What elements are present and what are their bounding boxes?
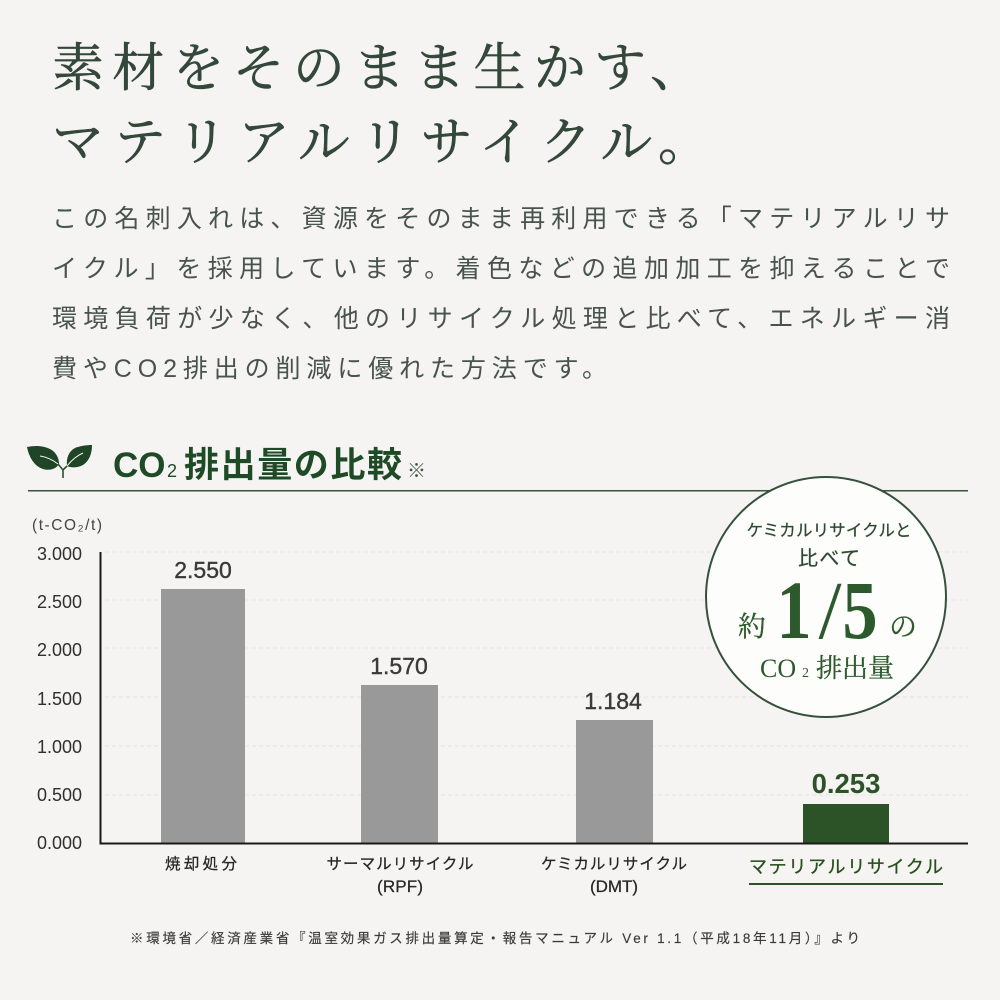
highlighted category: マテリアルリサイクル [749, 857, 943, 877]
y axis labels: 3.000 [37, 544, 82, 564]
highlight underline [749, 883, 943, 885]
unit label: (t-CO₂/t) [32, 517, 102, 534]
callout circle: 5 [842, 564, 878, 656]
callout circle: 2 [802, 666, 809, 681]
title [52, 41, 710, 172]
callout circle: 1 [776, 564, 812, 656]
body text: 費やCO2排出の削減に優れた方法です。 [52, 355, 607, 383]
chart heading: ※ [407, 461, 426, 482]
chart heading [113, 446, 426, 485]
callout circle [706, 477, 946, 717]
callout circle: 約 [738, 611, 766, 643]
y axis labels: 2.000 [37, 640, 82, 660]
category labels: (RPF) [377, 877, 423, 896]
bar values [174, 557, 642, 714]
title: 素材をそのまま生かす、 [52, 41, 702, 98]
y axis labels: 0.500 [37, 785, 82, 805]
y axis labels: 2.500 [37, 592, 82, 612]
bar values: 1.570 [370, 653, 428, 679]
y axis labels: 1.000 [37, 737, 82, 757]
bar values: 1.184 [584, 688, 642, 714]
category labels: (DMT) [590, 877, 638, 896]
highlighted value: 0.253 [812, 768, 880, 799]
title: マテリアルリサイクル。 [52, 115, 710, 172]
axes [100, 552, 968, 844]
category labels: ケミカルリサイクル [541, 855, 687, 873]
chart heading: 排出量の比較 [184, 446, 402, 485]
y axis labels: 1.500 [37, 689, 82, 709]
body text: この名刺入れは、資源をそのまま再利用できる「マテリアルリサ [52, 205, 950, 233]
body text [52, 205, 950, 383]
callout circle: 排出量 [816, 654, 894, 683]
bar chart [32, 517, 968, 896]
icon: leaves [27, 445, 92, 478]
bars [161, 589, 245, 843]
grid [105, 552, 968, 795]
bar values: 2.550 [174, 557, 232, 583]
callout circle: / [818, 564, 842, 656]
body text: イクル」を採用しています。着色などの追加加工を抑えることで [52, 255, 950, 283]
callout circle: の [889, 612, 917, 643]
category labels: 焼却処分 [165, 855, 237, 873]
y axis labels: 0.000 [37, 833, 82, 853]
callout circle: ケミカルリサイクルと [746, 521, 912, 540]
chart heading: CO [113, 446, 166, 485]
chart heading: 2 [167, 461, 177, 481]
body text: 環境負荷が少なく、他のリサイクル処理と比べて、エネルギー消 [52, 305, 950, 333]
y axis labels [37, 544, 82, 853]
category labels [165, 855, 687, 896]
callout circle: 比べて [798, 547, 860, 570]
footnote: ※環境省／経済産業省『温室効果ガス排出量算定・報告マニュアル Ver 1.1（平成18年11月）』より [130, 931, 860, 946]
callout circle: CO [760, 654, 796, 683]
category labels: サーマルリサイクル [326, 855, 474, 873]
heading rule [28, 490, 968, 492]
